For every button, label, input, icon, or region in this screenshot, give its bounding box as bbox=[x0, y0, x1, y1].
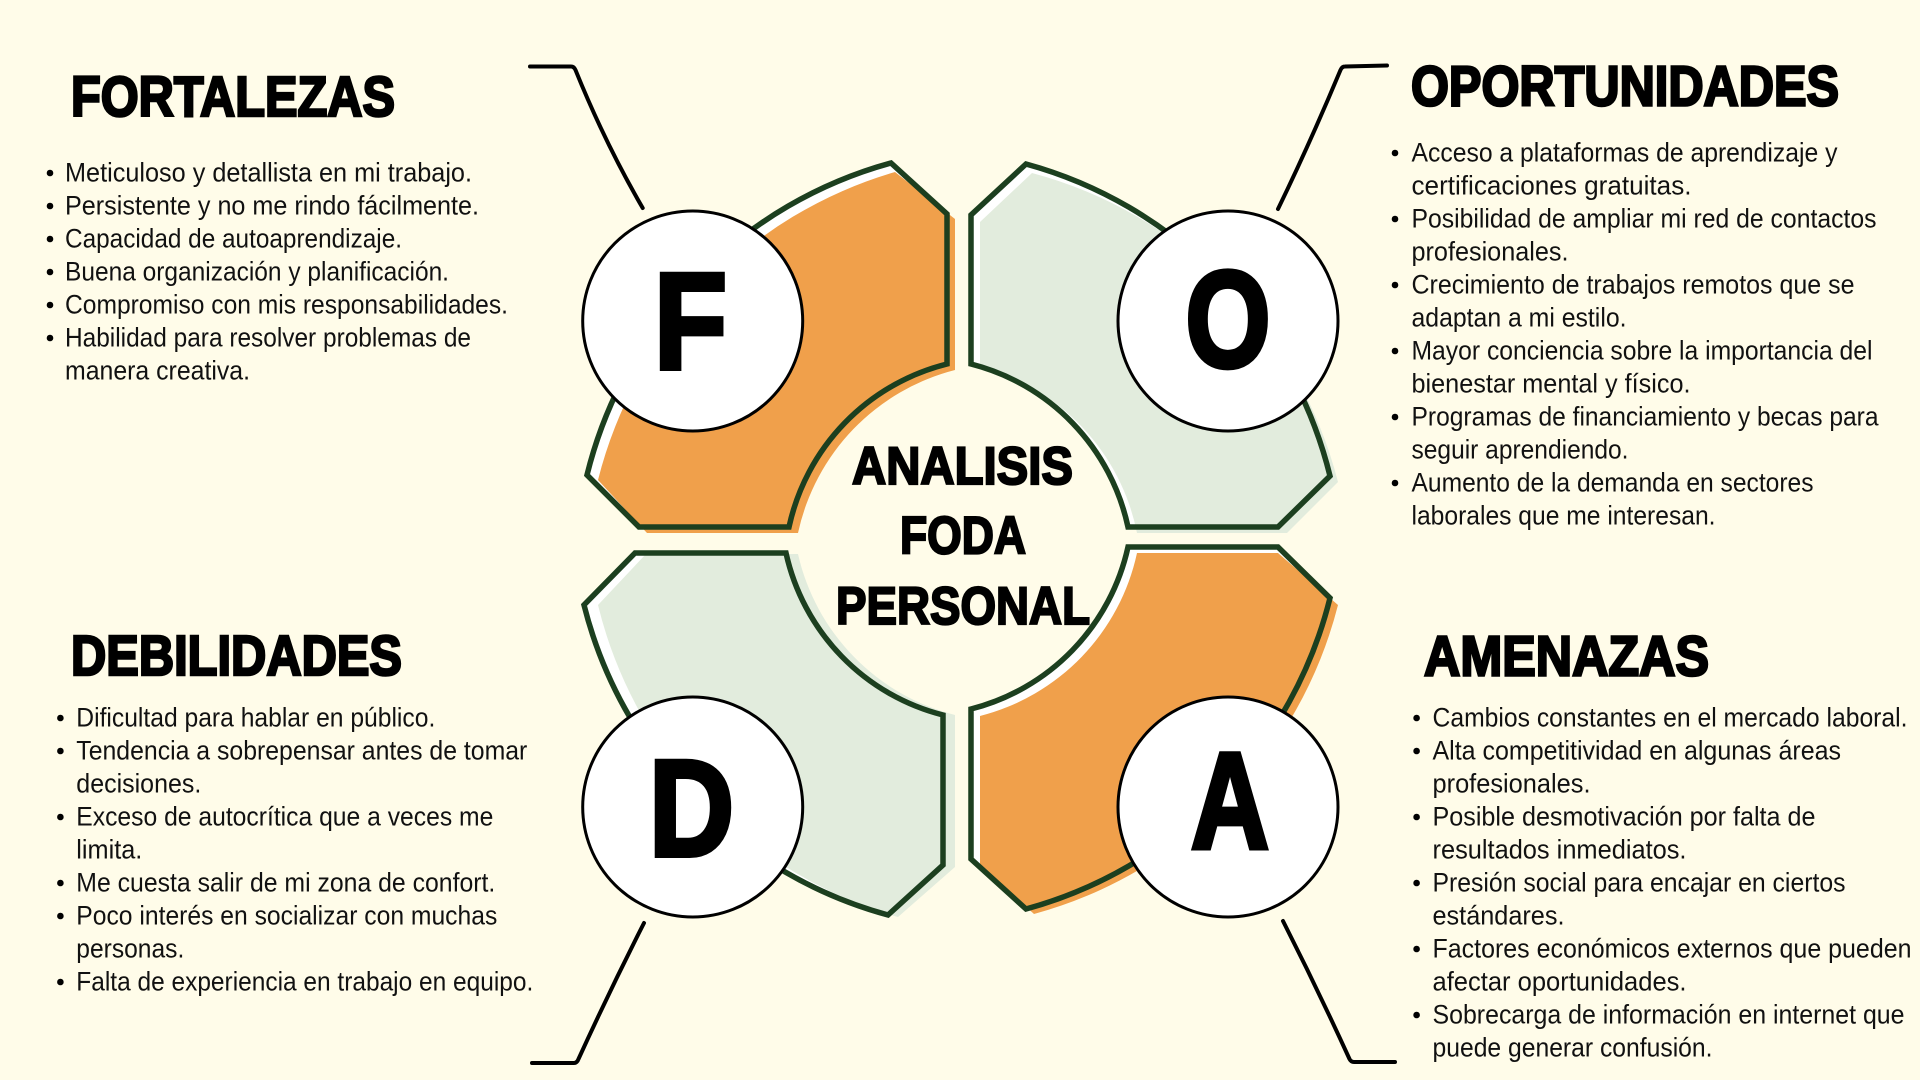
diagram segment: O mint bbox=[971, 164, 1338, 533]
heading: oportunidades: OPORTUNIDADES bbox=[1411, 54, 1839, 118]
list: fortalezas: Meticuloso y detallista en mi trabajo. bbox=[65, 158, 472, 188]
list: fortalezas: Buena organización y planificación. bbox=[65, 257, 449, 287]
badge: D bbox=[583, 697, 803, 917]
list: oportunidades: Programas de financiamiento y becas para bbox=[1412, 402, 1879, 432]
list: debilidades: Dificultad para hablar en público. bbox=[76, 703, 435, 733]
connector: debilidades bbox=[532, 923, 644, 1063]
panel: oportunidades bbox=[1392, 54, 1879, 531]
list: oportunidades bbox=[1392, 138, 1879, 531]
list: fortalezas: Habilidad para resolver problemas de bbox=[65, 323, 471, 353]
heading: amenazas: AMENAZAS bbox=[1424, 624, 1709, 688]
list: debilidades: Exceso de autocrítica que a veces me bbox=[76, 802, 493, 832]
list: oportunidades: seguir aprendiendo. bbox=[1412, 435, 1628, 465]
connector: amenazas bbox=[1283, 921, 1395, 1062]
list: amenazas: Posible desmotivación por falta de bbox=[1432, 802, 1816, 832]
badge: A: A bbox=[1191, 725, 1269, 878]
badge: O bbox=[1118, 211, 1338, 431]
diagram segment: F orange bbox=[587, 163, 955, 533]
diagram segment: A orange bbox=[971, 547, 1338, 914]
badge: F: F bbox=[654, 246, 727, 398]
list: fortalezas: Capacidad de autoaprendizaje. bbox=[65, 224, 402, 254]
list: fortalezas bbox=[47, 158, 508, 386]
list: oportunidades: laborales que me interesan. bbox=[1412, 501, 1716, 531]
list: debilidades: limita. bbox=[76, 835, 142, 865]
list: oportunidades: Acceso a plataformas de aprendizaje y bbox=[1412, 138, 1838, 168]
list: oportunidades: Posibilidad de ampliar mi red de contactos bbox=[1412, 204, 1876, 234]
panel: amenazas bbox=[1413, 624, 1912, 1063]
connector: fortalezas bbox=[530, 66, 643, 208]
list: fortalezas: Persistente y no me rindo fácilmente. bbox=[65, 191, 479, 221]
badge: F bbox=[583, 211, 803, 431]
list: debilidades: Falta de experiencia en trabajo en equipo. bbox=[76, 967, 533, 997]
list: fortalezas: manera creativa. bbox=[65, 356, 250, 386]
list: oportunidades: certificaciones gratuitas. bbox=[1412, 171, 1692, 201]
list: amenazas: afectar oportunidades. bbox=[1432, 967, 1686, 997]
list: amenazas: puede generar confusión. bbox=[1432, 1033, 1712, 1063]
list: amenazas: Presión social para encajar en ciertos bbox=[1432, 868, 1846, 898]
badge: D: D bbox=[649, 732, 734, 886]
connector: oportunidades bbox=[1278, 66, 1387, 209]
list: oportunidades: profesionales. bbox=[1412, 237, 1568, 267]
badge: A bbox=[1118, 697, 1338, 917]
center title bbox=[836, 437, 1090, 636]
center title: FODA bbox=[900, 506, 1026, 566]
list: oportunidades: Crecimiento de trabajos remotos que se bbox=[1412, 270, 1854, 300]
list: amenazas: estándares. bbox=[1432, 901, 1564, 931]
list: oportunidades: Mayor conciencia sobre la importancia del bbox=[1412, 336, 1872, 366]
heading: debilidades: DEBILIDADES bbox=[71, 624, 402, 688]
center title: PERSONAL bbox=[836, 577, 1090, 636]
panel: debilidades bbox=[57, 624, 533, 997]
list: oportunidades: adaptan a mi estilo. bbox=[1412, 303, 1626, 333]
list: debilidades: Me cuesta salir de mi zona de confort. bbox=[76, 868, 495, 898]
diagram segment: D mint bbox=[584, 553, 955, 917]
list: fortalezas: Compromiso con mis responsabilidades. bbox=[65, 290, 508, 320]
panel: fortalezas bbox=[47, 65, 508, 386]
list: debilidades: personas. bbox=[76, 934, 184, 964]
list: debilidades bbox=[57, 703, 533, 997]
list: debilidades: Poco interés en socializar con muchas bbox=[76, 901, 497, 931]
center title: ANALISIS bbox=[852, 437, 1073, 496]
heading: fortalezas: FORTALEZAS bbox=[71, 65, 395, 129]
list: amenazas: resultados inmediatos. bbox=[1432, 835, 1686, 865]
list: amenazas: profesionales. bbox=[1432, 769, 1590, 799]
badge: O: O bbox=[1186, 244, 1270, 396]
list: debilidades: decisiones. bbox=[76, 769, 201, 799]
list: amenazas bbox=[1413, 703, 1912, 1063]
list: oportunidades: bienestar mental y físico. bbox=[1412, 369, 1690, 399]
list: amenazas: Alta competitividad en algunas áreas bbox=[1432, 736, 1841, 766]
list: debilidades: Tendencia a sobrepensar antes de tomar bbox=[76, 736, 527, 766]
list: oportunidades: Aumento de la demanda en sectores bbox=[1412, 468, 1814, 498]
